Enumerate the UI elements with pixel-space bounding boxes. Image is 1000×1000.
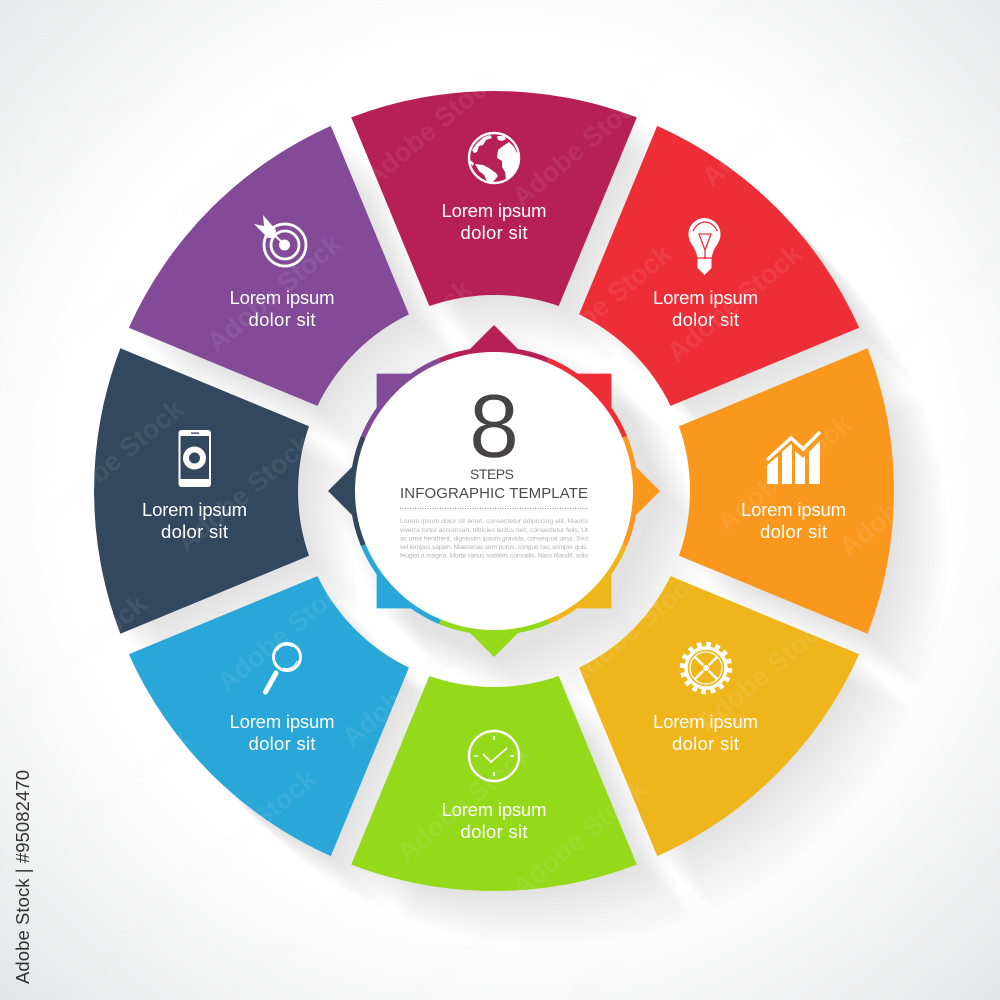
panel: step navy, phone [94, 348, 309, 634]
label: Lorem ipsum [442, 799, 546, 820]
watermark pattern: Adobe Stock [561, 563, 708, 693]
panel: step blue, magnifier [110, 521, 464, 875]
watermark pattern: Adobe Stock [336, 623, 483, 753]
icon: clock [469, 731, 519, 781]
watermark pattern: Adobe Stock [33, 58, 180, 188]
panel: step navy, phone: dolor sit [161, 521, 228, 542]
dotted divider [400, 508, 588, 510]
centre heading: INFOGRAPHIC TEMPLATE [400, 485, 588, 502]
label: Lorem ipsum [230, 287, 334, 308]
watermark pattern: Adobe Stock [43, 393, 190, 523]
centre paragraph: vel tempus sapien. Maecenas sem purus, congue nec semper quis, [400, 544, 588, 551]
watermark pattern: Adobe Stock [506, 773, 653, 903]
icon: growth chart [767, 432, 820, 484]
panel: step orange, chart [679, 348, 894, 634]
icon: globe [469, 133, 519, 183]
watermark pattern: Adobe Stock [221, 873, 368, 1000]
watermark pattern: Adobe Stock [201, 228, 348, 358]
panel: step purple, target [110, 107, 464, 461]
panel: step purple, target: dolor sit [248, 309, 316, 330]
watermark pattern: Adobe Stock [661, 238, 808, 368]
watermark pattern: Adobe Stock [696, 63, 843, 193]
long shadows [96, 93, 948, 945]
label: Lorem ipsum [442, 200, 546, 221]
centre paragraph: viverra tortor accumsan, ultricies lectus nec, consectetur felis. Ut [400, 527, 588, 534]
panel: step gold, gear: dolor sit [672, 733, 739, 754]
vertical stock id: Adobe Stock | #95082470 [12, 770, 33, 984]
watermark pattern: Adobe Stock [158, 98, 305, 228]
watermark pattern: Adobe Stock [846, 778, 993, 908]
watermark pattern: Adobe Stock [691, 608, 838, 738]
icon: gear [682, 644, 730, 692]
panel: step green, clock: dolor sit [460, 821, 528, 842]
panel: step orange, chart: dolor sit [760, 521, 827, 542]
watermark pattern: Adobe Stock [833, 433, 980, 563]
label: Lorem ipsum [653, 287, 758, 308]
watermark pattern: Adobe Stock [391, 738, 538, 868]
panel: step blue, magnifier: dolor sit [248, 733, 316, 754]
centre paragraph: ac urna hendrerit, dignissim ipsum gravida, consequat urna. Sed [400, 536, 588, 542]
panel: step red, light bulb: dolor sit [672, 309, 739, 330]
watermark pattern: Adobe Stock [211, 568, 358, 698]
watermark pattern: Adobe Stock [331, 273, 478, 403]
watermark pattern: Adobe Stock [49, 723, 196, 853]
centre paragraph: feugiat a magna. Morbi varius sodales convallis. Nam blandit, odio [400, 552, 588, 560]
icon: magnifier [266, 644, 300, 692]
centre number: 8 [469, 377, 519, 477]
watermark pattern: Adobe Stock [506, 83, 653, 213]
watermark pattern: Adobe Stock [716, 748, 863, 878]
label: Lorem ipsum [741, 499, 846, 520]
icon: smartphone [178, 430, 211, 487]
centre white circle [355, 352, 633, 630]
panel: step green, clock [351, 676, 637, 891]
centre star ring [328, 325, 660, 657]
icon: target with arrow [254, 215, 306, 266]
label: Lorem ipsum [230, 711, 334, 732]
panel: step gold, gear [524, 521, 878, 875]
centre heading [400, 466, 588, 502]
watermark pattern: Adobe Stock [358, 63, 505, 193]
watermark pattern: Adobe Stock [531, 238, 678, 368]
centre paragraph: Lorem ipsum dolor sit amet, consectetur adipiscing elit. Mauris [400, 518, 589, 525]
panel: step crimson, globe: dolor sit [460, 222, 528, 243]
centre heading: STEPS [470, 466, 514, 482]
watermark pattern: Adobe Stock [821, 100, 968, 230]
watermark pattern: Adobe Stock [0, 273, 143, 403]
icon: light bulb [688, 218, 720, 275]
panel: step crimson, globe [351, 91, 637, 306]
watermark pattern: Adobe Stock [176, 763, 323, 893]
label: Lorem ipsum [142, 499, 247, 520]
watermark pattern: Adobe Stock [6, 588, 153, 718]
watermark pattern: Adobe Stock [171, 428, 318, 558]
label: Lorem ipsum [653, 711, 758, 732]
centre paragraph [400, 518, 589, 560]
panel: step red, light bulb [524, 107, 878, 461]
watermark pattern: Adobe Stock [711, 408, 858, 538]
